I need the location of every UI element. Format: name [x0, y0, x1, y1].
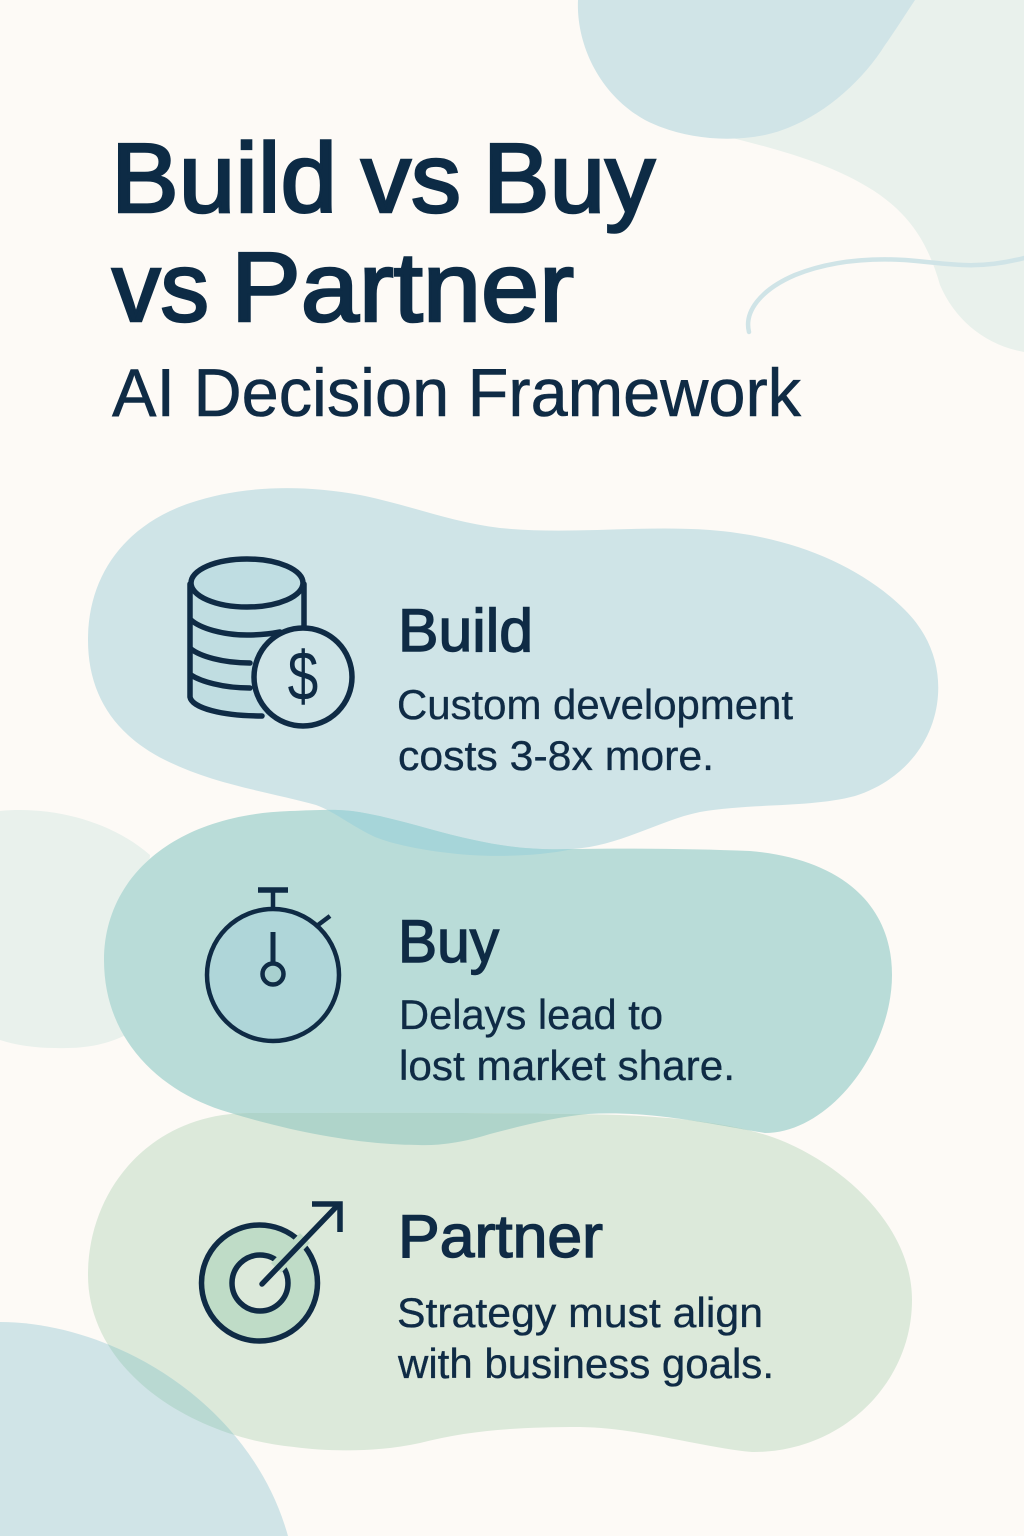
panel text: build: costs 3-8x more.: [398, 732, 714, 779]
title: Buy: [483, 123, 655, 233]
panel text: partner: Strategy must align: [397, 1289, 763, 1336]
panel: build background: [88, 488, 938, 856]
icon: database with dollar coin: $: [288, 638, 318, 716]
panel text: build: Build: [398, 597, 533, 664]
panel text: partner: with business goals.: [397, 1340, 774, 1387]
panel: buy background: [104, 810, 892, 1145]
icon: target with arrow: [202, 1204, 340, 1341]
panel text: build: Custom development: [397, 681, 793, 728]
panel: partner background: [88, 1113, 912, 1452]
title: Build: [111, 123, 337, 233]
overlap: build and buy: [327, 810, 572, 856]
overlap: buy and partner: [233, 1113, 751, 1146]
title: Partner: [231, 232, 574, 342]
icon: database with dollar coin: [190, 559, 352, 726]
subtitle: AI Decision Framework: [112, 355, 802, 431]
decorative blob: bottom left: [0, 1322, 288, 1536]
panel text: partner: [397, 1203, 774, 1387]
decorative blob: top right blue: [578, 0, 915, 139]
panel text: partner: Partner: [398, 1203, 603, 1270]
decorative blob: left pale: [0, 810, 150, 1048]
title: [111, 123, 655, 342]
panel text: build: [397, 597, 793, 779]
title: vs: [112, 232, 209, 342]
title: vs: [361, 123, 461, 233]
panel text: buy: lost market share.: [399, 1042, 735, 1089]
panel text: buy: [398, 908, 735, 1089]
decorative blob: top right pale: [700, 0, 1024, 352]
overlap: bottom left blob and partner: [108, 1344, 234, 1435]
decorative curved line: [748, 258, 1024, 332]
icon: stopwatch: [207, 890, 339, 1041]
panel text: buy: Delays lead to: [399, 991, 663, 1038]
panel text: buy: Buy: [398, 908, 499, 975]
